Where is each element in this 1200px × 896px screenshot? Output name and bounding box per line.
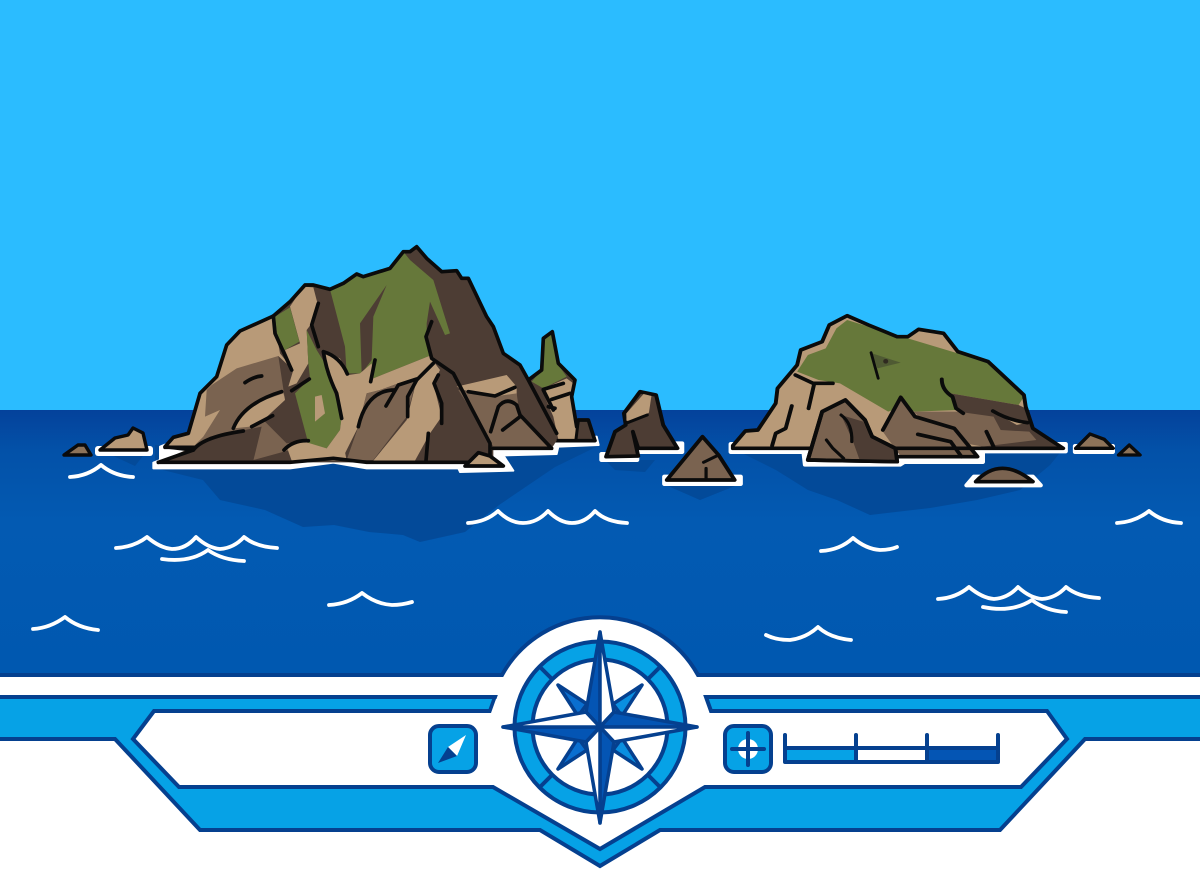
- diagonal star points: [558, 685, 642, 769]
- white surf shapes: [601, 443, 1113, 485]
- sky: [0, 0, 1200, 410]
- large left island: [153, 247, 599, 472]
- compass ring: [524, 650, 676, 804]
- small rock right: [1076, 434, 1113, 448]
- rock colour facets: [160, 252, 550, 462]
- low dome rock: [976, 468, 1033, 482]
- compass: [503, 632, 697, 823]
- dark rock facets: [883, 393, 1063, 457]
- outline and cracks: [158, 247, 570, 462]
- sea: [0, 410, 1200, 676]
- top rule and medallion arc: [0, 617, 1200, 675]
- surf outline: [153, 437, 599, 472]
- blue band: [0, 697, 1200, 866]
- vegetation: [797, 320, 1024, 412]
- white inner plate: [133, 711, 1067, 849]
- island silhouette fill: [158, 247, 557, 462]
- waves: [33, 465, 1181, 640]
- scale bar: [785, 735, 998, 762]
- tiny rock right: [1119, 445, 1140, 455]
- small rocks far left: [64, 428, 150, 455]
- small rock at foot: [465, 453, 503, 466]
- island reflections: [105, 445, 1062, 542]
- middle and right islands: [601, 316, 1140, 485]
- bottom panel: [0, 617, 1200, 896]
- main star points: [503, 632, 697, 823]
- icon: compass needle button: [430, 726, 476, 772]
- icon: crosshair button: [725, 726, 771, 772]
- front rock: [808, 400, 897, 462]
- right island body: [733, 316, 1063, 448]
- panel outlines: [0, 697, 1200, 866]
- white panel background: [0, 676, 1200, 896]
- right island outline and cracks: [733, 316, 1063, 457]
- spire: [528, 332, 595, 441]
- centre rock: [667, 437, 735, 480]
- medallion cap: [502, 618, 698, 676]
- flag on summit: [871, 353, 901, 378]
- white gap above plate: [491, 699, 709, 713]
- arch rock: [606, 392, 677, 457]
